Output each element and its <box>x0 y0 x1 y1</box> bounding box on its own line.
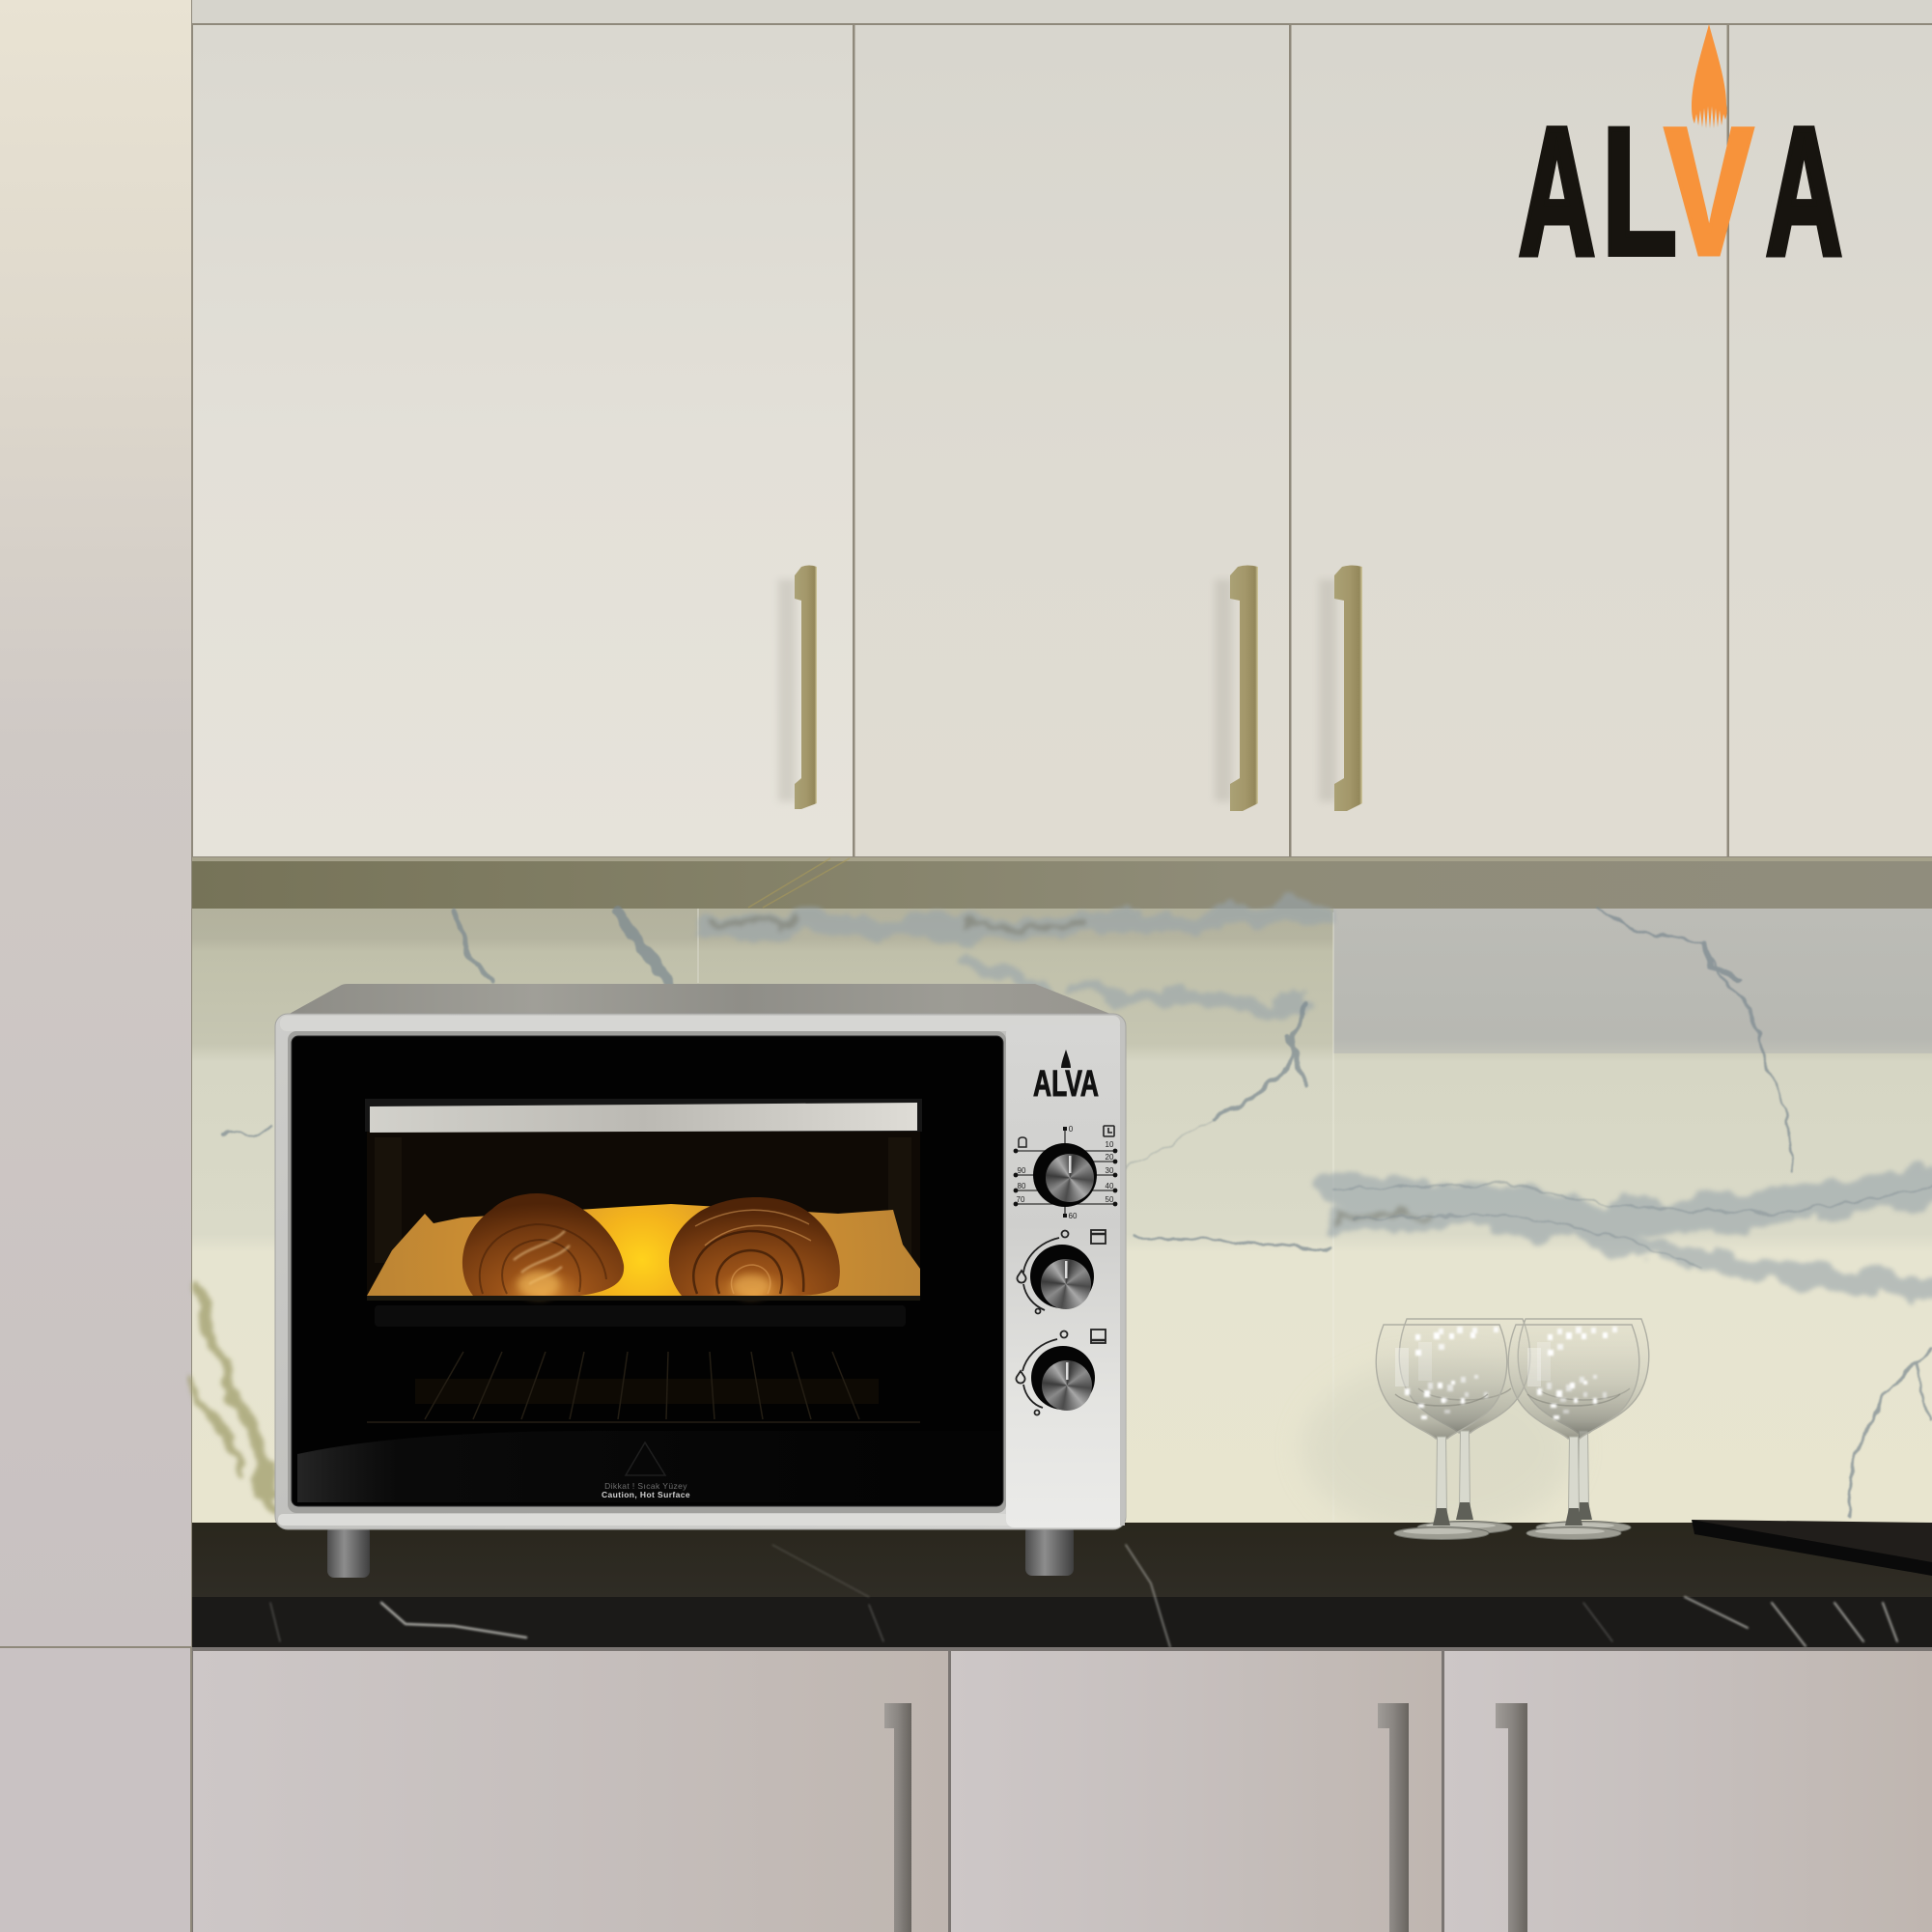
logo wordmark: A <box>1766 90 1842 293</box>
marble counter veins <box>270 1545 1897 1647</box>
timer dial scale: 70 <box>1017 1195 1025 1204</box>
croissant right <box>669 1197 840 1298</box>
icon: clock <box>1104 1126 1114 1136</box>
logo wordmark: V <box>1665 90 1753 293</box>
oven feet <box>327 1526 1074 1578</box>
croissant left <box>462 1193 624 1298</box>
ALVA logo top right <box>1519 24 1842 293</box>
timer dial scale: 0 <box>1069 1125 1074 1134</box>
logo wordmark <box>1519 90 1842 293</box>
under-cabinet shadow band <box>192 857 1932 909</box>
oven tray shelf <box>367 1296 920 1301</box>
glass caustics on wall <box>1303 1361 1574 1535</box>
oven window <box>367 1132 920 1422</box>
logo flame <box>1692 24 1727 128</box>
oven door handle <box>365 1099 922 1133</box>
timer dial scale: 40 <box>1106 1182 1114 1190</box>
upper cabinet doors <box>193 25 1932 856</box>
control panel surface <box>1006 1025 1124 1527</box>
lower cabinet doors <box>192 1647 1932 1932</box>
oven <box>275 984 1126 1578</box>
icon: hand <box>1019 1137 1026 1147</box>
oven body <box>275 1014 1126 1529</box>
panel logo: ALVA <box>1033 1064 1099 1105</box>
panel logo <box>1033 1050 1099 1105</box>
marble veins <box>193 909 1932 1516</box>
marble backsplash <box>192 909 1932 1535</box>
cabinet handle: door 1 <box>795 566 817 809</box>
counter edge <box>192 1597 1932 1647</box>
baking paper <box>367 1204 920 1296</box>
knob: function 1 <box>1030 1245 1094 1309</box>
oven wire rack <box>367 1352 920 1422</box>
timer dial scale: 50 <box>1106 1195 1114 1204</box>
function dial scale 2 <box>1016 1330 1106 1415</box>
door glass reflection <box>297 1431 1000 1502</box>
tray on the counter <box>1692 1520 1932 1576</box>
left pillar upper <box>0 0 191 1646</box>
countertop <box>192 1523 1932 1647</box>
hot surface warning: Dikkat ! Sıcak Yüzey <box>604 1481 687 1491</box>
timer dial scale: 60 <box>1069 1212 1078 1220</box>
wine glasses <box>1376 1319 1649 1539</box>
timer dial scale <box>1014 1125 1117 1220</box>
upper cabinet top band <box>192 0 1932 23</box>
timer dial scale: 90 <box>1018 1166 1026 1175</box>
logo wordmark: L <box>1602 90 1677 293</box>
handle shadows <box>778 579 1496 1932</box>
timer dial scale: 30 <box>1106 1166 1114 1175</box>
logo wordmark: A <box>1519 90 1595 293</box>
cabinet handle: door 3 <box>1334 566 1362 811</box>
left pillar lower <box>0 1648 190 1932</box>
knob: timer <box>1033 1143 1097 1207</box>
oven top surface <box>286 984 1115 1016</box>
timer dial scale: 80 <box>1018 1182 1026 1190</box>
function dial scale 1 <box>1018 1230 1106 1313</box>
timer dial scale: 20 <box>1106 1153 1114 1162</box>
timer dial scale: 10 <box>1106 1140 1114 1149</box>
lower cabinet handles <box>884 1703 1527 1932</box>
hot surface warning <box>602 1442 690 1499</box>
knob: function 2 <box>1031 1346 1095 1411</box>
hot surface warning: Caution, Hot Surface <box>602 1490 690 1499</box>
cabinet handle: door 2 <box>1230 566 1258 811</box>
oven door frame <box>288 1031 1006 1513</box>
